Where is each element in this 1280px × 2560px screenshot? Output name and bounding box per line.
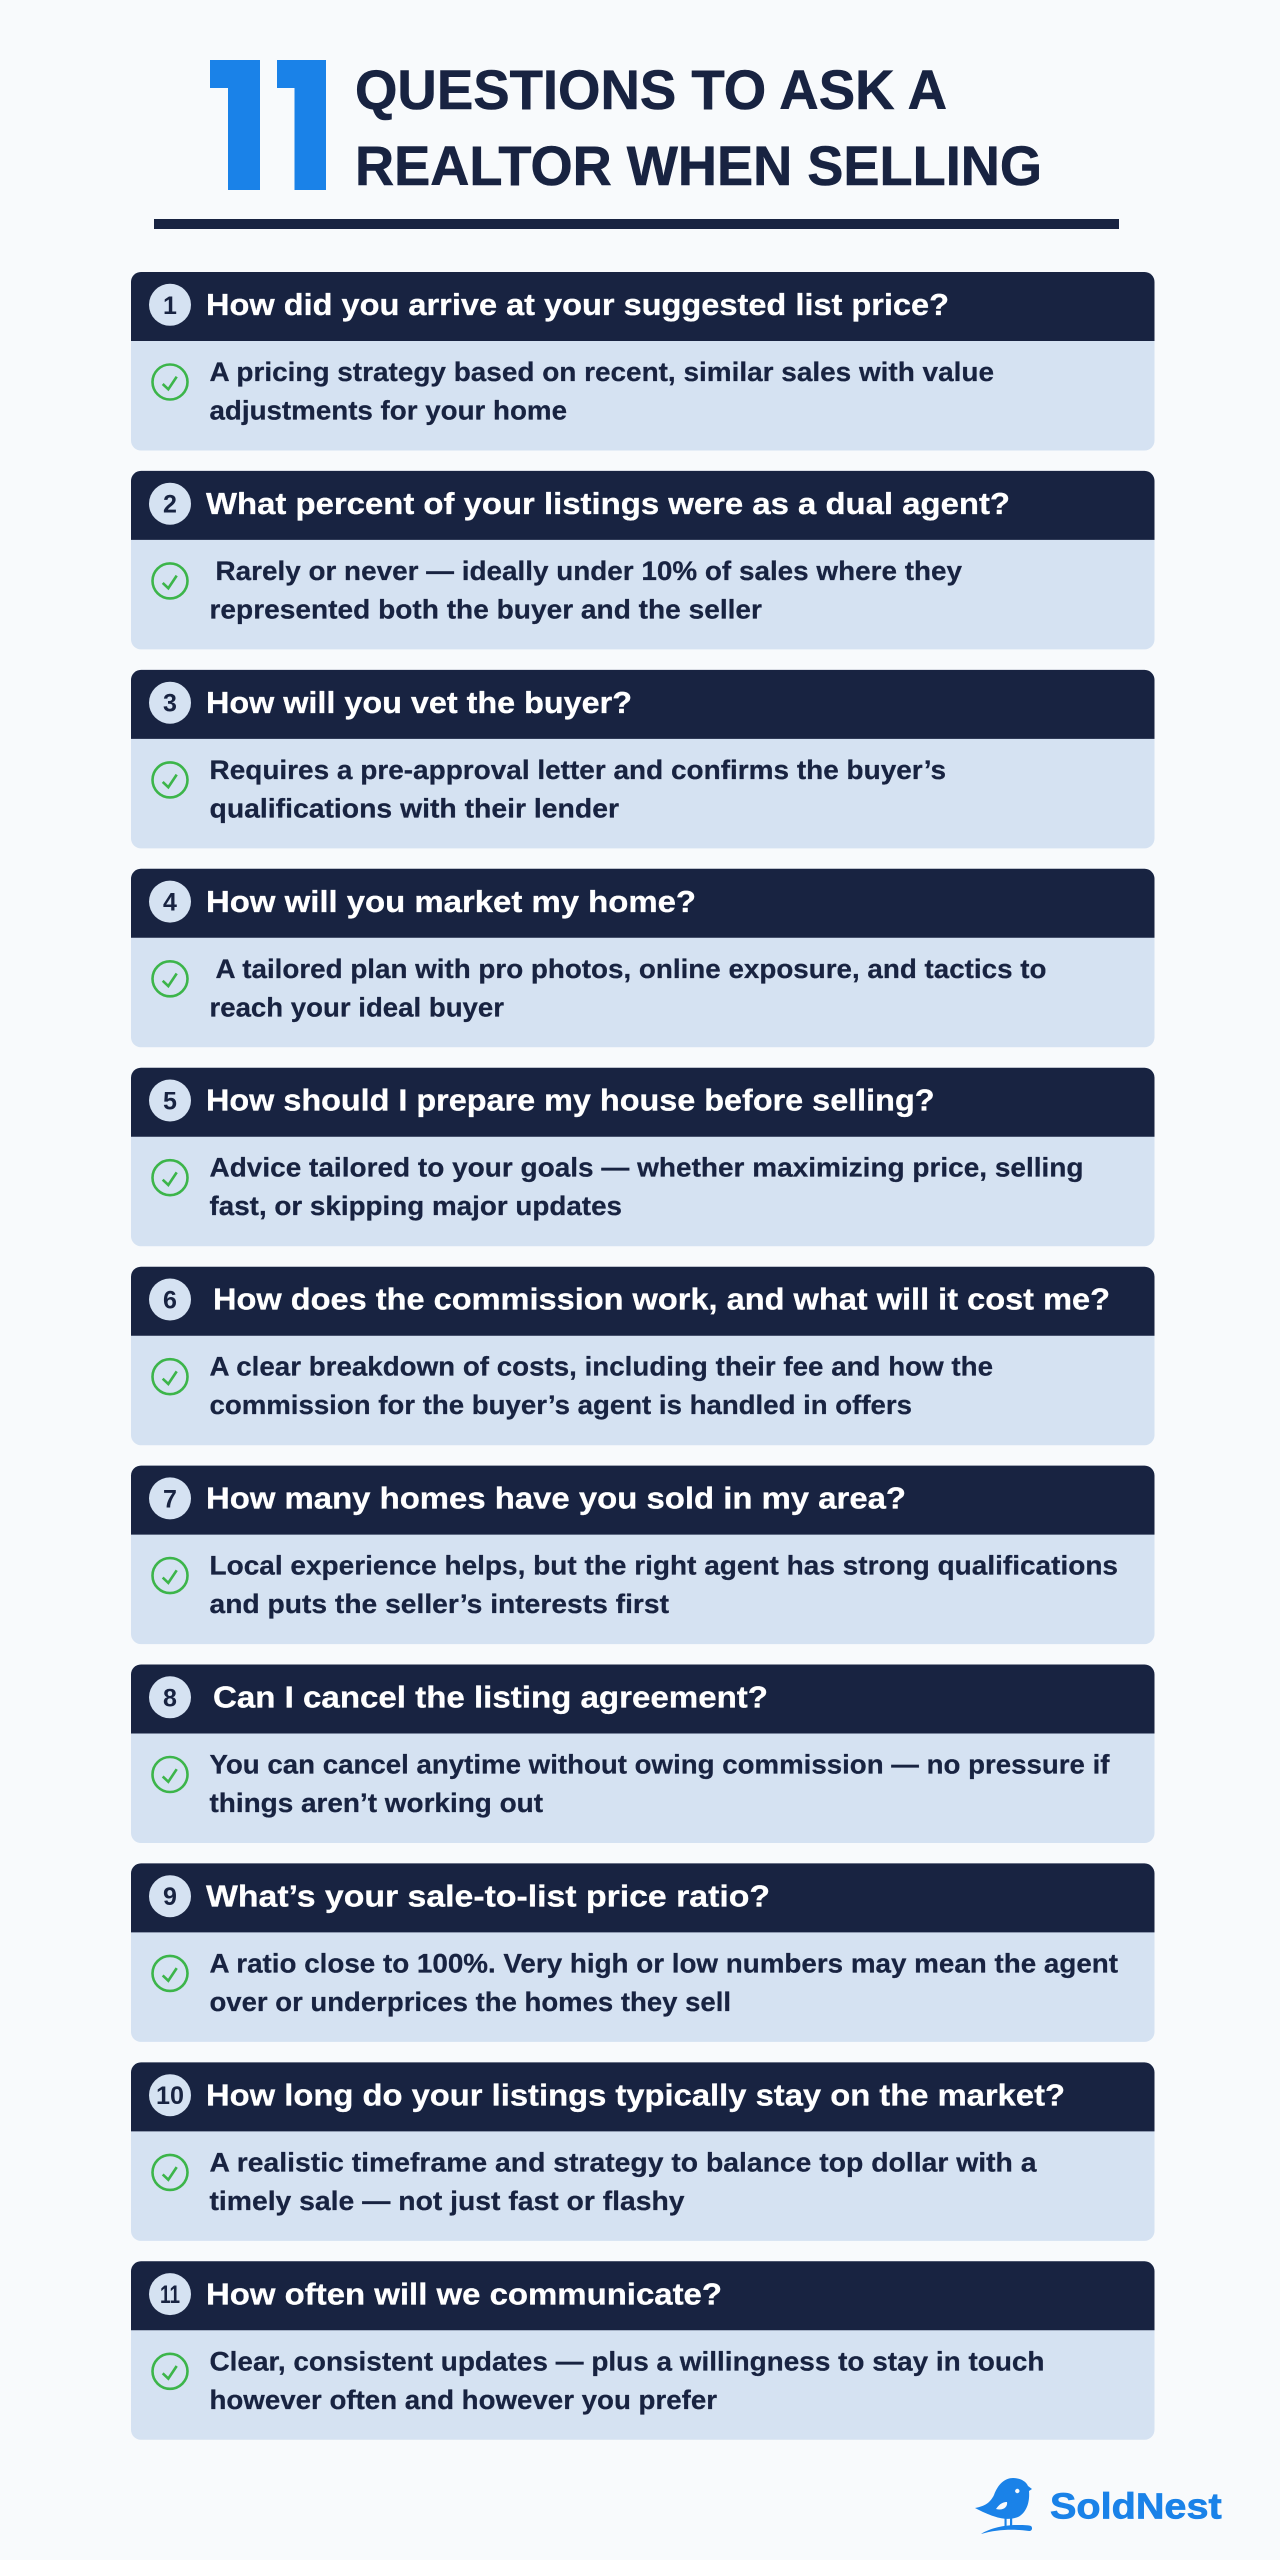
panel: question 2: 2 — [163, 491, 177, 519]
panel: question 3: How will you vet the buyer? — [206, 685, 632, 720]
panel: question 9: A ratio close to 100%. Very high or low numbers may mean the agent — [210, 1948, 1118, 1978]
panel: question 9 — [131, 1863, 1154, 2042]
panel: question 8 — [131, 1664, 1154, 1843]
panel: question 11: 11 — [160, 2281, 180, 2309]
panel: question 7: 7 — [163, 1485, 177, 1513]
panel: question 5: Advice tailored to your goals — whether maximizing price, selling — [210, 1153, 1084, 1183]
panel: question 4: How will you market my home? — [206, 884, 696, 919]
panel: question 4 — [131, 869, 1154, 1047]
panel: question 2 — [131, 471, 1154, 649]
panel: question 5: fast, or skipping major updates — [210, 1191, 622, 1221]
panel: question 2: represented both the buyer and the seller — [210, 594, 762, 624]
panel: question 10: timely sale — not just fast or flashy — [210, 2186, 684, 2216]
panel: question 1: A pricing strategy based on recent, similar sales with value — [210, 357, 994, 387]
panel: question 10 — [131, 2062, 1154, 2241]
panel: question 11 — [131, 2261, 1154, 2440]
panel: question 11: however often and however you prefer — [210, 2385, 717, 2415]
panel: question 7 — [131, 1466, 1154, 1644]
panel: question 6: commission for the buyer’s agent is handled in offers — [210, 1390, 912, 1420]
panel: question 2: What percent of your listings were as a dual agent? — [206, 486, 1010, 521]
panel: question 10: A realistic timeframe and strategy to balance top dollar with a — [210, 2147, 1038, 2177]
panel: question 5 — [131, 1068, 1154, 1246]
panel: question 5: How should I prepare my house before selling? — [206, 1083, 934, 1118]
panel: question 6 — [131, 1267, 1154, 1445]
panel: question 9: 9 — [163, 1883, 177, 1911]
panel: question 9: What’s your sale-to-list price ratio? — [206, 1878, 770, 1913]
title — [210, 60, 1039, 190]
panel: question 6: How does the commission work, and what will it cost me? — [213, 1282, 1110, 1317]
panel: question 6: A clear breakdown of costs, including their fee and how the — [210, 1352, 993, 1382]
panel: question 1: adjustments for your home — [210, 396, 567, 426]
panel: question 8: 8 — [163, 1684, 177, 1712]
panel: question 1: 1 — [163, 292, 177, 320]
panel: question 4: 4 — [163, 889, 177, 917]
panel: question 10: How long do your listings typically stay on the market? — [206, 2077, 1065, 2112]
panel: question 7: Local experience helps, but the right agent has strong qualifications — [210, 1551, 1118, 1581]
big number 11: 11 — [210, 25, 326, 229]
panel: question 1 — [131, 272, 1154, 450]
panel: question 8: things aren’t working out — [210, 1788, 543, 1818]
panel: question 7: and puts the seller’s interests first — [210, 1589, 669, 1619]
logo: SoldNest — [975, 2478, 1222, 2534]
panel: question 11: How often will we communicate? — [206, 2276, 722, 2311]
panel: question 5: 5 — [163, 1087, 177, 1115]
panel: question 3: qualifications with their lender — [210, 793, 620, 823]
panel: question 11: Clear, consistent updates — plus a willingness to stay in touch — [210, 2346, 1044, 2376]
wordmark: SoldNest — [1050, 2485, 1222, 2526]
panel: question 10: 10 — [156, 2082, 184, 2110]
title line 2: REALTOR WHEN SELLING — [355, 134, 1042, 197]
panel: question 9: over or underprices the homes they sell — [210, 1987, 731, 2017]
title line 1: QUESTIONS TO ASK A — [355, 58, 947, 121]
panel: question 3: Requires a pre-approval letter and confirms the buyer’s — [210, 755, 946, 785]
panel: question 7: How many homes have you sold in my area? — [206, 1481, 906, 1516]
panel: question 6: 6 — [163, 1286, 177, 1314]
panel: question 3: 3 — [163, 690, 177, 718]
panel: question 1: How did you arrive at your suggested list price? — [206, 287, 949, 322]
panel: question 2: Rarely or never — ideally under 10% of sales where they — [216, 556, 962, 586]
panel: question 8: You can cancel anytime without owing commission — no pressure if — [210, 1750, 1111, 1780]
panel: question 3 — [131, 670, 1154, 848]
panel: question 4: A tailored plan with pro photos, online exposure, and tactics to — [216, 954, 1046, 984]
panel: question 8: Can I cancel the listing agreement? — [213, 1680, 768, 1714]
icon: bird on branch — [975, 2478, 1032, 2534]
panel: question 4: reach your ideal buyer — [210, 992, 504, 1022]
